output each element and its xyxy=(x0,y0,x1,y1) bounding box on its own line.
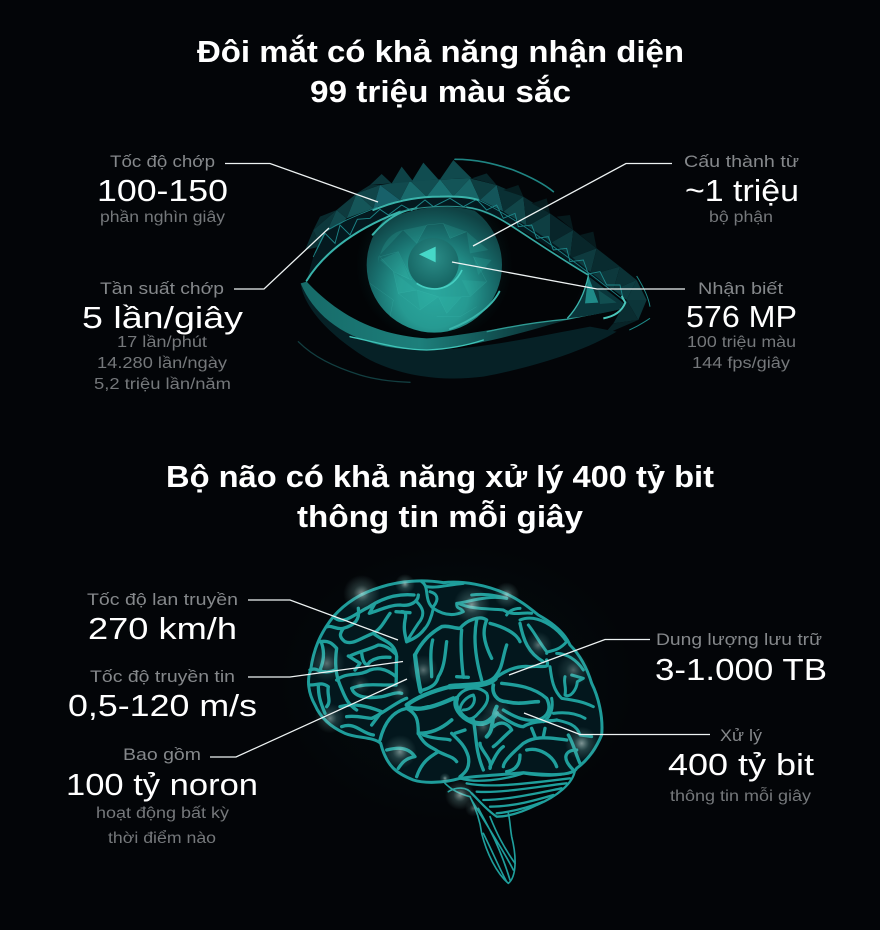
label: parts: Cấu thành từ xyxy=(684,152,799,171)
label: storage: Dung lượng lưu trữ xyxy=(656,630,822,649)
leader: storage xyxy=(509,640,650,675)
label: processing: thông tin mỗi giây xyxy=(670,788,811,805)
label: propagation speed: Tốc độ lan truyền xyxy=(87,590,238,609)
eye: inner corner xyxy=(567,276,625,318)
label: blink speed: Tốc độ chớp xyxy=(110,152,215,171)
eye: top faint arc xyxy=(455,159,553,192)
label: blink speed: 100-150 xyxy=(97,173,228,208)
title: eye section: Đôi mắt có khả năng nhận diện xyxy=(197,33,684,69)
eye: iris glow xyxy=(356,187,513,343)
label: neurons xyxy=(66,745,258,847)
eye: lower lid band xyxy=(301,282,620,379)
label: perception xyxy=(686,279,797,372)
leader: perception xyxy=(452,262,685,289)
leader: propagation speed xyxy=(248,600,398,640)
brain: lower folds xyxy=(380,687,580,777)
label: perception: 100 triệu màu xyxy=(687,334,796,351)
eye: catchlight xyxy=(419,247,436,262)
eye: pupil xyxy=(408,238,459,289)
title: brain section: Bộ não có khả năng xử lý 400 tỷ bit xyxy=(166,459,714,494)
label: neurons: Bao gồm xyxy=(123,745,201,764)
eye: pupil rim xyxy=(417,270,462,289)
label: blink frequency: 17 lần/phút xyxy=(117,334,208,351)
label: processing: 400 tỷ bit xyxy=(668,747,814,782)
leader: neurons xyxy=(210,679,407,757)
label: transmission speed xyxy=(68,667,257,723)
label: perception: 144 fps/giây xyxy=(692,355,790,372)
leader: processing xyxy=(524,713,710,734)
title: brain section xyxy=(166,459,714,534)
brain: glowing spots xyxy=(308,574,598,817)
label: blink speed: phần nghìn giây xyxy=(100,209,225,226)
label: blink frequency: 14.280 lần/ngày xyxy=(97,355,227,372)
label: storage: 3-1.000 TB xyxy=(655,652,827,687)
eye: upper lid bright lines xyxy=(307,196,623,300)
brain: parietal folds xyxy=(407,582,593,737)
label: blink frequency: 5 lần/giây xyxy=(82,300,244,335)
label: neurons: hoạt động bất kỳ xyxy=(96,805,229,822)
label: blink frequency: 5,2 triệu lần/năm xyxy=(94,376,231,393)
label: perception: Nhận biết xyxy=(698,279,783,298)
leader: blink frequency xyxy=(234,228,329,289)
leader: parts xyxy=(473,164,672,246)
label: processing xyxy=(668,726,814,805)
eye: outer corner accent xyxy=(629,276,650,330)
eye: iris xyxy=(367,197,502,333)
title: brain section: thông tin mỗi giây xyxy=(297,499,584,534)
leader: blink speed xyxy=(225,164,378,202)
label: parts xyxy=(684,152,799,226)
label: transmission speed: Tốc độ truyền tin xyxy=(90,667,235,686)
brain: cortex silhouette and outline xyxy=(309,581,602,782)
brain: cerebellum xyxy=(460,770,575,817)
label: neurons: thời điểm nào xyxy=(108,830,216,847)
label: blink frequency: Tần suất chớp xyxy=(100,279,224,298)
leader: transmission speed xyxy=(248,662,403,677)
brain: frontal sulci xyxy=(310,595,425,735)
label: perception: 576 MP xyxy=(686,299,797,334)
label: propagation speed: 270 km/h xyxy=(88,611,237,646)
eye: lid lattice xyxy=(307,197,623,300)
label: propagation speed xyxy=(87,590,238,646)
eye: iris rim arcs xyxy=(373,208,499,329)
brain: halo xyxy=(277,543,637,823)
brain: stem xyxy=(445,783,515,883)
label: blink speed xyxy=(97,152,228,226)
label: neurons: 100 tỷ noron xyxy=(66,767,258,802)
label: parts: ~1 triệu xyxy=(685,173,799,208)
illustration: eye xyxy=(298,159,650,382)
label: storage xyxy=(655,630,827,687)
title: eye section: 99 triệu màu sắc xyxy=(310,73,571,109)
label: parts: bộ phận xyxy=(709,209,773,226)
illustration: brain xyxy=(277,543,637,883)
title: eye section xyxy=(197,33,684,109)
label: transmission speed: 0,5-120 m/s xyxy=(68,688,257,723)
label: blink frequency xyxy=(82,279,244,393)
eye: eyeball opening xyxy=(307,207,587,338)
eye: upper lid faceted band xyxy=(305,160,647,335)
brain: central folds xyxy=(415,618,549,737)
eye: bottom faint arc xyxy=(298,342,410,382)
label: processing: Xử lý xyxy=(720,726,763,745)
